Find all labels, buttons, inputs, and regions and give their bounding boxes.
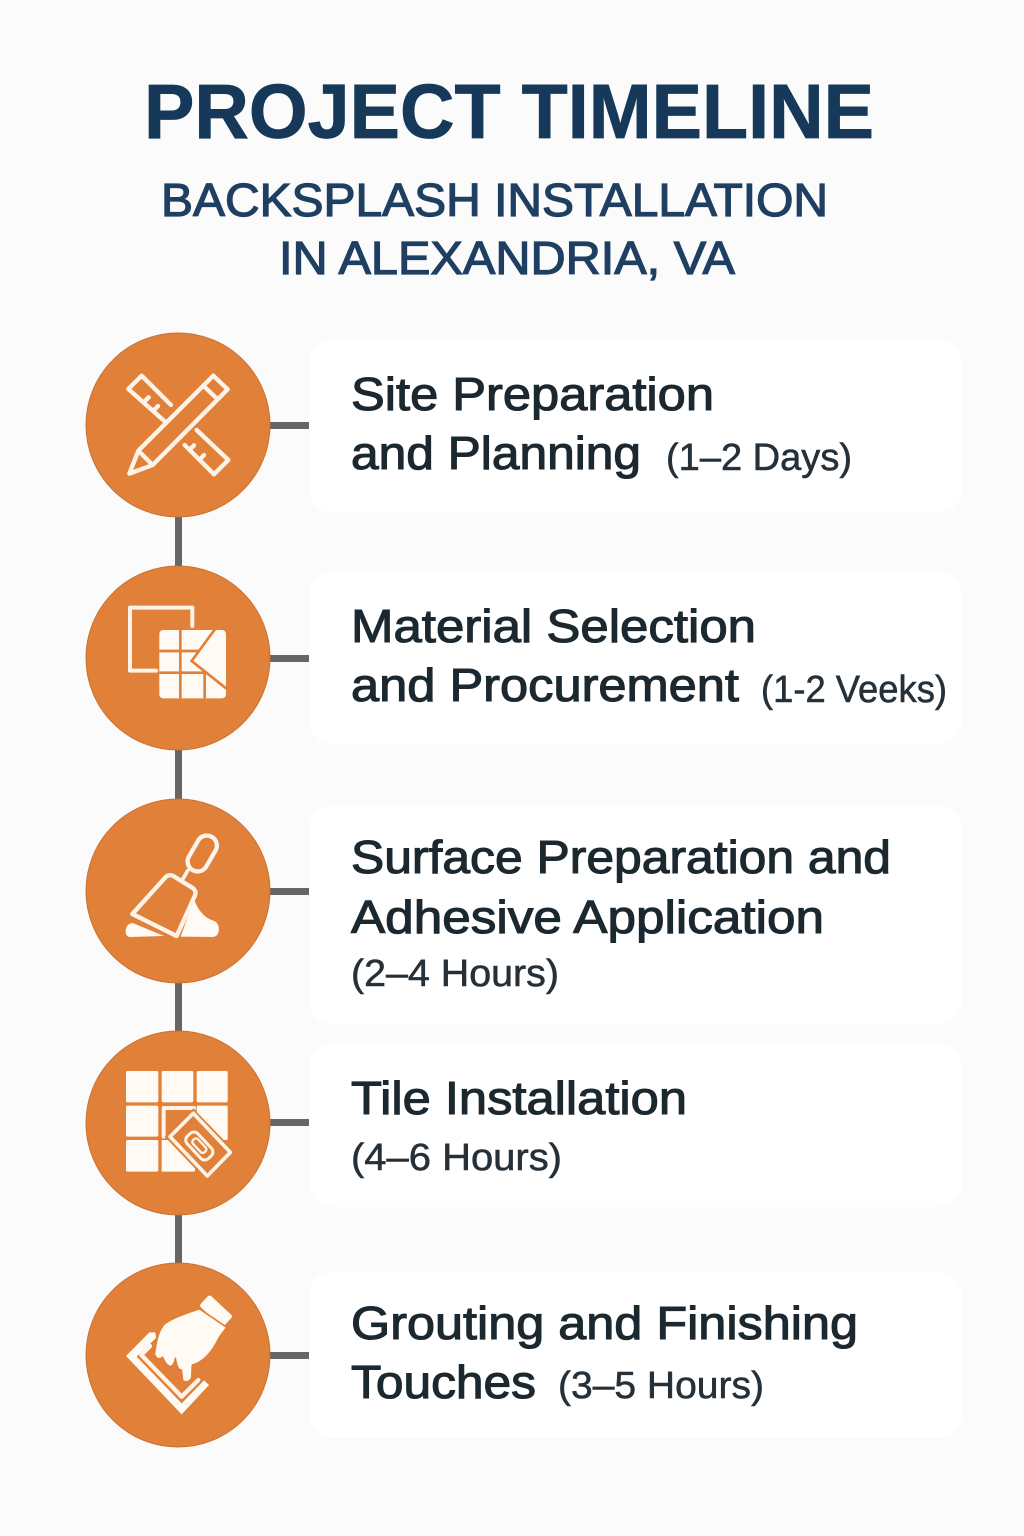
step 2 circle [86, 566, 270, 750]
step 1 circle [86, 333, 270, 517]
subtitle [161, 174, 828, 284]
step 3 duration: (2–4 Hours) [351, 953, 559, 995]
timeline connectors [175, 422, 309, 1359]
step 1: site preparation [86, 333, 962, 517]
step 3 heading: Adhesive Application [351, 891, 824, 943]
step 2: material selection [86, 566, 962, 750]
step 3 circle [86, 799, 270, 983]
step 3 heading [351, 831, 891, 943]
step 1 heading: Site Preparation [351, 368, 714, 420]
card 2 [309, 572, 962, 744]
card 4 [309, 1043, 962, 1207]
card 1 [309, 340, 962, 513]
step 2 heading: and Procurement [351, 659, 739, 711]
subtitle: BACKSPLASH INSTALLATION [161, 174, 828, 226]
step 3 heading: Surface Preparation and [351, 831, 891, 883]
step 5: grouting and finishing [86, 1263, 962, 1447]
step 4 circle [86, 1031, 270, 1215]
subtitle: IN ALEXANDRIA, VA [279, 232, 735, 284]
card 5 [309, 1272, 962, 1438]
step 2 duration: (1-2 Veeks) [761, 669, 947, 711]
icon: ruler and pencil [128, 376, 228, 474]
step 5 heading: Grouting and Finishing [351, 1297, 858, 1349]
step 2 heading [351, 600, 756, 711]
card 3 [309, 805, 962, 1024]
icon: hand with grout float [126, 1294, 233, 1414]
step 5 duration: (3–5 Hours) [558, 1365, 764, 1407]
icon: tile samples [130, 608, 227, 698]
step 3: surface preparation [86, 799, 962, 1024]
step 1 heading: and Planning [351, 427, 641, 479]
title: PROJECT TIMELINE [144, 69, 874, 155]
step 4: tile installation [86, 1031, 962, 1215]
step 5 circle [86, 1263, 270, 1447]
icon: tile grid with tile being placed [126, 1071, 236, 1181]
step 4 heading: Tile Installation [351, 1072, 687, 1124]
step 1 heading [351, 368, 714, 479]
step 5 heading: Touches [351, 1356, 536, 1408]
icon: trowel and adhesive [126, 832, 220, 937]
step 2 heading: Material Selection [351, 600, 756, 652]
step 4 duration: (4–6 Hours) [351, 1137, 562, 1179]
step 5 heading [351, 1297, 858, 1408]
step 1 duration: (1–2 Days) [666, 437, 852, 479]
